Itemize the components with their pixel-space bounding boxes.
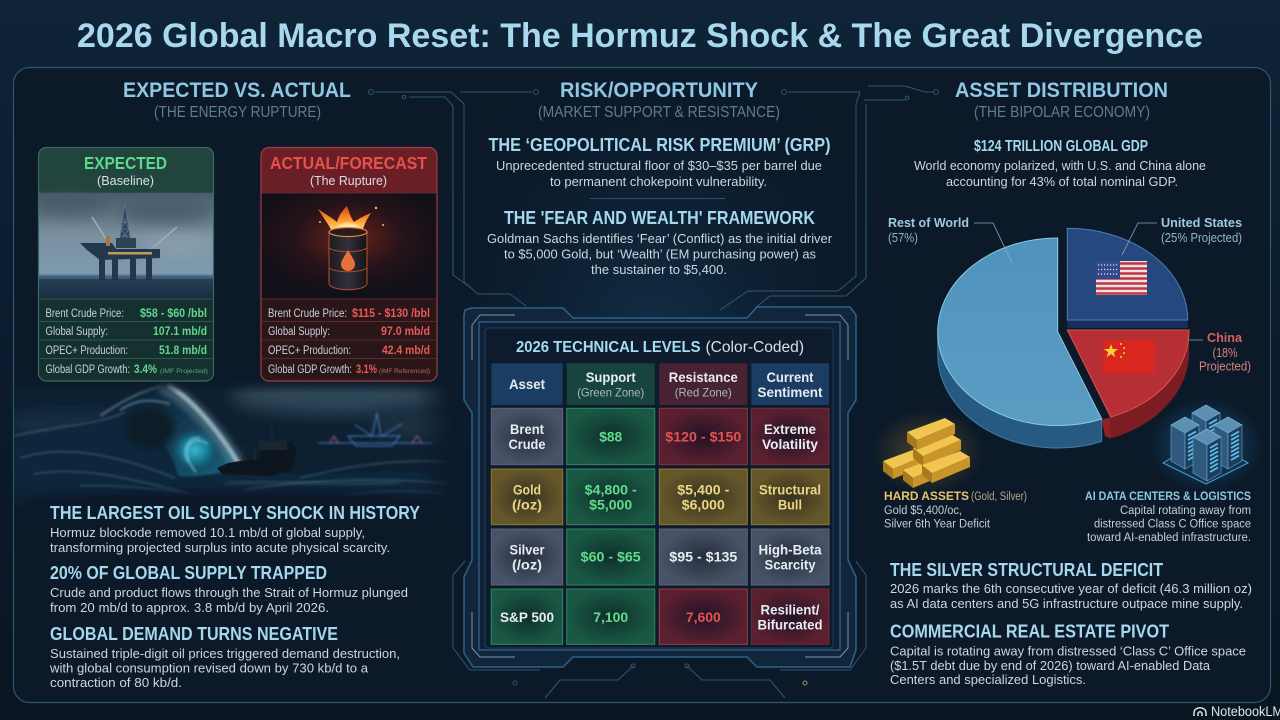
card: actual forecast: Global GDP Growth: bbox=[268, 364, 352, 376]
table row: s&p 500: Bifurcated bbox=[758, 616, 822, 632]
table row: gold bbox=[491, 469, 829, 525]
table row: s&p 500: S&P 500 bbox=[500, 609, 554, 625]
table row: silver: $95 - $135 bbox=[669, 548, 738, 564]
table header row bbox=[491, 363, 829, 405]
text block: silver deficit: as AI data centers and 5G infrastructure outpace mine supply. bbox=[890, 597, 1243, 611]
text block: global demand negative: contraction of 80 kb/d. bbox=[50, 676, 182, 690]
circuit connectors bbox=[368, 86, 938, 698]
text block: global demand negative: GLOBAL DEMAND TURNS NEGATIVE bbox=[50, 624, 338, 644]
text block: largest oil supply shock: THE LARGEST OIL SUPPLY SHOCK IN HISTORY bbox=[50, 503, 420, 523]
label: united states: (25% Projected) bbox=[1161, 231, 1242, 245]
table row: s&p 500 bbox=[491, 589, 829, 644]
card: actual forecast: $115 - $130 /bbl bbox=[352, 308, 430, 320]
text block: fear and wealth framework: Goldman Sachs identifies ‘Fear’ (Conflict) as the initial driver bbox=[487, 232, 832, 246]
panel: expected vs actual bbox=[0, 79, 490, 690]
heading: risk opportunity bbox=[538, 79, 780, 121]
heading: asset distribution: ASSET DISTRIBUTION bbox=[955, 79, 1168, 102]
card: actual forecast: (The Rupture) bbox=[310, 173, 387, 188]
table row: brent crude: Brent bbox=[510, 421, 544, 437]
card: actual forecast: 3.1% bbox=[356, 364, 377, 376]
panel: technical levels table bbox=[464, 307, 856, 667]
table row: silver: $60 - $65 bbox=[581, 548, 641, 564]
table row: gold: $4,800 - bbox=[585, 482, 637, 498]
text block: ai data centers: Capital rotating away from bbox=[1120, 505, 1251, 517]
text block: geopolitical risk premium: to permanent chokepoint vulnerability. bbox=[550, 175, 767, 189]
text block: geopolitical risk premium: THE ‘GEOPOLITICAL RISK PREMIUM’ (GRP) bbox=[488, 135, 831, 155]
text block: largest oil supply shock: transforming projected surplus into acute physical scarcity. bbox=[50, 541, 390, 555]
text block: global demand negative bbox=[49, 624, 400, 690]
card: expected bbox=[30, 148, 220, 381]
table header row: (Red Zone) bbox=[675, 386, 732, 400]
text block: largest oil supply shock bbox=[50, 503, 420, 555]
text block: fear and wealth framework: to $5,000 Gold, but ‘Wealth’ (EM purchasing power) as bbox=[504, 248, 816, 262]
table row: gold: $5,000 bbox=[589, 496, 632, 512]
panel: asset distribution bbox=[872, 79, 1264, 687]
table header row: Sentiment bbox=[758, 384, 823, 400]
table header row: Current bbox=[766, 369, 814, 385]
card: actual forecast: OPEC+ Production: bbox=[268, 345, 351, 357]
label: rest of world bbox=[888, 215, 969, 245]
heading: risk opportunity: RISK/OPPORTUNITY bbox=[560, 79, 758, 102]
table row: s&p 500: 7,600 bbox=[686, 609, 721, 625]
panel: risk opportunity bbox=[464, 79, 856, 667]
text block: silver deficit: 2026 marks the 6th consecutive year of deficit (46.3 million oz) bbox=[890, 582, 1252, 596]
text block: global demand negative: with global consumption revised down by 730 kb/d to a bbox=[49, 662, 368, 676]
text block: commercial real estate bbox=[890, 622, 1246, 687]
text block: largest oil supply shock: Hormuz blockode removed 10.1 mb/d of global supply, bbox=[50, 526, 365, 540]
text block: 20 percent supply trapped: Crude and product flows through the Strait of Hormuz plunged bbox=[50, 586, 408, 600]
text block: hard assets: Gold $5,400/oc, bbox=[884, 505, 962, 517]
card: actual forecast: Brent Crude Price: bbox=[268, 308, 347, 320]
table row: silver: Scarcity bbox=[764, 556, 816, 572]
card: expected: Brent Crude Price: bbox=[46, 308, 124, 320]
text block: commercial real estate: ($1.5T debt due by end of 2026) toward AI-enabled Data bbox=[890, 659, 1210, 673]
illustration: burning oil barrel bbox=[261, 193, 437, 299]
text block: hard assets: (Gold, Silver) bbox=[971, 491, 1027, 503]
text block: fear and wealth framework: the sustainer to $5,400. bbox=[591, 263, 727, 277]
icon: us flag bbox=[1096, 261, 1147, 295]
text block: geopolitical risk premium: Unprecedented structural floor of $30–$35 per barrel due bbox=[496, 159, 822, 173]
label: united states bbox=[1161, 215, 1242, 245]
text block: commercial real estate: Centers and specialized Logistics. bbox=[890, 673, 1086, 687]
card: expected: 3.4% bbox=[134, 364, 157, 376]
label: china: Projected) bbox=[1199, 360, 1251, 374]
pie slice: china bbox=[1067, 330, 1189, 438]
table header row: Support bbox=[586, 369, 636, 385]
text block: commercial real estate: COMMERCIAL REAL ESTATE PIVOT bbox=[890, 622, 1169, 642]
table row: gold: Structural bbox=[759, 482, 821, 498]
label: united states: United States bbox=[1161, 215, 1242, 230]
card: actual forecast: (IMF Referenced) bbox=[379, 368, 430, 375]
table row: brent crude: $88 bbox=[599, 428, 622, 444]
text block: silver deficit: THE SILVER STRUCTURAL DEFICIT bbox=[890, 560, 1163, 580]
table row: silver: Silver bbox=[510, 542, 545, 558]
pie slice: united states bbox=[1067, 228, 1188, 328]
icon: warship outline bbox=[318, 413, 432, 446]
table row: brent crude: Volatility bbox=[762, 436, 818, 452]
heading: expected vs actual: EXPECTED VS. ACTUAL bbox=[123, 79, 351, 102]
card: expected: Global GDP Growth: bbox=[46, 364, 130, 376]
label: rest of world: (57%) bbox=[888, 231, 918, 245]
text block: ai data centers: distressed Class C Office space bbox=[1094, 518, 1251, 530]
table title bbox=[516, 339, 804, 356]
label: china: China bbox=[1207, 330, 1243, 345]
table title: (Color-Coded) bbox=[706, 339, 804, 356]
table row: gold: $5,400 - bbox=[677, 482, 730, 498]
text block: global gdp: World economy polarized, with U.S. and China alone bbox=[914, 159, 1206, 173]
icon: server racks bbox=[1148, 397, 1264, 493]
text block: 20 percent supply trapped bbox=[50, 563, 408, 615]
icon: gold bars bbox=[872, 410, 984, 494]
icon: tanker ship bbox=[217, 427, 297, 476]
table header row: Asset bbox=[509, 376, 545, 392]
card: expected: (IMF Projected) bbox=[160, 368, 208, 375]
title: 2026 Global Macro Reset: The Hormuz Shock & The Great Divergence bbox=[77, 17, 1203, 55]
card: expected: Global Supply: bbox=[46, 326, 108, 338]
text block: ai data centers bbox=[1085, 491, 1251, 544]
text block: 20 percent supply trapped: from 20 mb/d to approx. 3.8 mb/d by April 2026. bbox=[50, 601, 329, 615]
table row: gold: (/oz) bbox=[512, 496, 542, 512]
text block: global gdp: accounting for 43% of total nominal GDP. bbox=[946, 175, 1178, 189]
card: expected: OPEC+ Production: bbox=[46, 345, 128, 357]
heading: expected vs actual: (THE ENERGY RUPTURE) bbox=[154, 104, 321, 121]
table row: brent crude: Extreme bbox=[764, 421, 816, 437]
table header row: Resistance bbox=[669, 369, 738, 385]
table row: silver: (/oz) bbox=[512, 556, 542, 572]
text block: geopolitical risk premium bbox=[488, 135, 831, 189]
table row: silver bbox=[491, 529, 829, 585]
text block: hard assets: HARD ASSETS bbox=[884, 491, 969, 503]
label: rest of world: Rest of World bbox=[888, 215, 969, 230]
text block: global demand negative: Sustained triple-digit oil prices triggered demand destruction, bbox=[50, 647, 400, 661]
text block: ai data centers: toward AI-enabled infrastructure. bbox=[1087, 532, 1251, 544]
illustration: oil rig bbox=[30, 193, 220, 299]
text block: hard assets: Silver 6th Year Deficit bbox=[884, 518, 991, 530]
heading: asset distribution bbox=[955, 79, 1168, 121]
label: china: (18% bbox=[1212, 346, 1238, 360]
card: actual forecast: ACTUAL/FORECAST bbox=[270, 153, 427, 173]
table row: brent crude: Crude bbox=[508, 436, 546, 452]
pie slice: rest of world bbox=[938, 238, 1102, 448]
pie chart: gdp share bbox=[938, 223, 1203, 448]
heading: asset distribution: (THE BIPOLAR ECONOMY) bbox=[974, 104, 1150, 121]
text block: fear and wealth framework: THE 'FEAR AND WEALTH' FRAMEWORK bbox=[504, 208, 815, 228]
card: expected: (Baseline) bbox=[97, 173, 154, 188]
text block: silver deficit bbox=[890, 560, 1252, 611]
table row: brent crude bbox=[491, 408, 829, 465]
card: expected: EXPECTED bbox=[84, 153, 167, 173]
heading: expected vs actual bbox=[123, 79, 351, 121]
text block: commercial real estate: Capital is rotating away from distressed ‘Class C’ Office space bbox=[890, 644, 1246, 658]
text block: global gdp bbox=[914, 138, 1206, 189]
label: china bbox=[1199, 330, 1251, 374]
table row: silver: High-Beta bbox=[758, 542, 822, 558]
table row: s&p 500: 7,100 bbox=[593, 609, 628, 625]
card: actual forecast: 42.4 mb/d bbox=[382, 345, 430, 357]
card: expected: $58 - $60 /bbl bbox=[140, 308, 207, 320]
card: actual forecast: 97.0 mb/d bbox=[381, 326, 430, 338]
table row: gold: Bull bbox=[778, 496, 802, 512]
table row: brent crude: $120 - $150 bbox=[665, 428, 742, 444]
table title: 2026 TECHNICAL LEVELS bbox=[516, 339, 701, 356]
table row: gold: Gold bbox=[513, 482, 541, 498]
text block: hard assets bbox=[884, 491, 1027, 530]
text block: 20 percent supply trapped: 20% OF GLOBAL SUPPLY TRAPPED bbox=[50, 563, 327, 583]
card: actual forecast: Global Supply: bbox=[268, 326, 330, 338]
table row: s&p 500: Resilient/ bbox=[760, 602, 820, 618]
text block: global gdp: $124 TRILLION GLOBAL GDP bbox=[974, 138, 1148, 155]
sea storm illustration bbox=[14, 380, 446, 515]
card: expected: 107.1 mb/d bbox=[153, 326, 207, 338]
card: actual forecast bbox=[261, 148, 437, 381]
icon: china flag bbox=[1103, 340, 1155, 373]
card: expected: 51.8 mb/d bbox=[159, 345, 207, 357]
text block: ai data centers: AI DATA CENTERS & LOGISTICS bbox=[1085, 491, 1251, 503]
table row: gold: $6,000 bbox=[682, 496, 725, 512]
text block: fear and wealth framework bbox=[487, 208, 832, 277]
heading: risk opportunity: (MARKET SUPPORT & RESISTANCE) bbox=[538, 104, 780, 121]
table header row: (Green Zone) bbox=[577, 386, 644, 400]
